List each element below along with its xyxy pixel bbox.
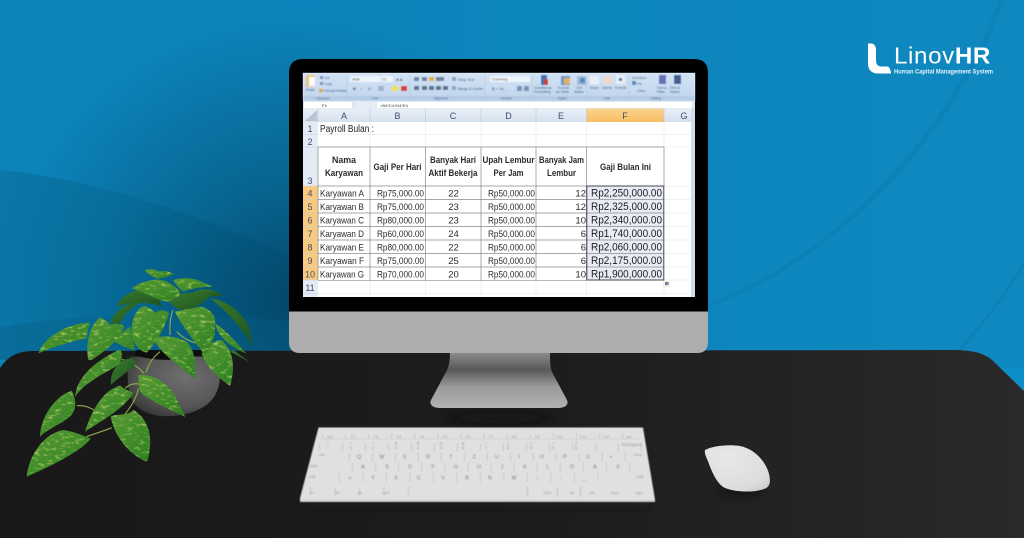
monitor stand xyxy=(430,352,568,408)
table header labels xyxy=(325,155,651,179)
logo icon xyxy=(868,44,891,74)
key labels row 3: T xyxy=(449,454,453,460)
table header labels: Aktif Bekerja xyxy=(428,168,478,179)
column A: names: Karyawan A xyxy=(320,188,365,200)
keyboard xyxy=(300,428,655,502)
key labels row 6: cmd xyxy=(543,491,551,495)
key labels row 1: F8 xyxy=(512,435,516,439)
key labels row 6: shift xyxy=(309,475,316,479)
key labels row 4: L xyxy=(546,464,550,470)
key labels row 4: J xyxy=(501,464,504,470)
excel ribbon: $ ~ % , xyxy=(492,86,506,92)
key labels row 5: V xyxy=(441,476,445,482)
key labels row 6: ctrl xyxy=(334,491,340,495)
key labels row 1 xyxy=(327,435,633,439)
scrollbar xyxy=(691,108,695,297)
row headers: 10 xyxy=(305,270,315,280)
excel ribbon: Styles xyxy=(574,90,584,94)
column A: names: Karyawan F xyxy=(320,256,364,267)
formula bar xyxy=(303,101,695,108)
formula bar: =B4*C4+D4*E4 xyxy=(380,103,409,108)
payroll table xyxy=(318,147,670,287)
column B: daily wage: Rp70,000.00 xyxy=(377,270,424,280)
column A: names: Karyawan B xyxy=(320,202,364,213)
excel ribbon: Cells xyxy=(603,96,610,100)
key labels row 2: ´ xyxy=(596,446,598,450)
excel ribbon: Editing xyxy=(651,96,661,100)
key labels row 2: ) xyxy=(530,441,532,446)
key labels row 4: A xyxy=(361,464,365,470)
key labels row 1: F7 xyxy=(489,435,493,439)
key labels row 5: M xyxy=(512,476,517,482)
key labels row 2: 9 xyxy=(530,446,533,450)
excel ribbon: I xyxy=(361,86,363,91)
key labels row 5: N xyxy=(488,476,492,482)
column B: daily wage: Rp75,000.00 xyxy=(377,256,424,267)
key labels row 2: 4 xyxy=(417,446,420,450)
key labels row 5: X xyxy=(394,476,398,482)
excel ribbon: Clear xyxy=(637,89,646,93)
title cell: Payroll Bulan: Payroll Bulan : xyxy=(320,124,374,135)
column D: overtime rate: Rp50,000.00 xyxy=(488,202,535,213)
key labels row 1: F5 xyxy=(443,435,447,439)
excel ribbon: 12 xyxy=(382,78,386,82)
spreadsheet screen xyxy=(303,73,695,297)
key labels row 2: ß xyxy=(575,446,578,450)
excel ribbon: Select xyxy=(670,90,680,94)
key labels row 2: ` xyxy=(596,441,598,446)
monitor xyxy=(289,59,708,408)
excel ribbon: Styles xyxy=(558,96,567,100)
key labels row 2: 2 xyxy=(372,446,375,450)
excel ribbon: Format Painter xyxy=(324,89,348,93)
excel ribbon: Arial xyxy=(352,78,360,82)
key labels row 6 xyxy=(309,453,644,495)
key labels row 3: R xyxy=(426,454,430,460)
key labels row 2: § xyxy=(395,441,398,446)
key labels row 2: 7 xyxy=(485,446,488,450)
key labels row 2: ( xyxy=(507,441,509,446)
column C: active days xyxy=(448,188,459,280)
key labels row 1: F4 xyxy=(420,435,424,439)
key labels row 2: & xyxy=(462,441,465,446)
excel ribbon: Merge & Center xyxy=(458,87,484,91)
key labels row 2: / xyxy=(485,441,487,446)
key labels row 2: 5 xyxy=(440,446,443,450)
column D: overtime rate: Rp50,000.00 xyxy=(488,242,535,254)
key labels row 3: Q xyxy=(357,454,362,460)
logo wordmark: LinovHR xyxy=(894,42,991,68)
column E: overtime hours: 6 xyxy=(581,256,586,267)
key labels row 4: Ä xyxy=(593,464,597,470)
key labels row 3: E xyxy=(403,454,407,460)
key labels row 4: H xyxy=(477,464,481,470)
row headers: 5 xyxy=(307,202,313,212)
column C: active days: 25 xyxy=(448,256,459,267)
column headers: A xyxy=(341,111,347,121)
table header labels: Gaji Bulan Ini xyxy=(600,162,651,173)
column D: overtime rate: Rp50,000.00 xyxy=(488,216,535,226)
table header labels: Banyak Hari xyxy=(430,155,476,166)
key labels row 2: = xyxy=(552,441,555,446)
key labels row 6: enter xyxy=(634,453,643,457)
key labels row 6: cmd xyxy=(382,491,390,495)
key labels row 5: < xyxy=(348,476,352,482)
excel ribbon: Sort & xyxy=(657,86,667,90)
excel ribbon xyxy=(303,73,695,101)
column C: active days: 24 xyxy=(448,229,459,240)
column F: monthly pay: Rp1,740,000.00 xyxy=(591,228,662,240)
column F: monthly pay: Rp1,900,000.00 xyxy=(591,268,662,280)
column C: active days: 20 xyxy=(448,270,459,280)
key labels row 1: F3 xyxy=(397,435,401,439)
column E: overtime hours: 12 xyxy=(575,202,586,213)
row headers: 4 xyxy=(307,188,313,198)
key labels row 4: G xyxy=(454,464,458,470)
excel ribbon: Wrap Text xyxy=(458,78,474,82)
excel ribbon: Alignment xyxy=(434,96,448,100)
key labels row 2: " xyxy=(372,441,374,446)
key labels row 3: O xyxy=(540,454,545,460)
green foliage leaves xyxy=(27,269,246,477)
column headers: F xyxy=(622,111,628,121)
column A: names: Karyawan D xyxy=(320,229,364,240)
key labels row 4: D xyxy=(408,464,412,470)
column D: overtime rate: Rp50,000.00 xyxy=(488,188,535,200)
key labels row 5 xyxy=(348,476,586,482)
column B: daily wage: Rp80,000.00 xyxy=(377,216,424,226)
excel ribbon: U xyxy=(368,86,371,91)
mouse xyxy=(705,445,770,495)
key labels row 3: Z xyxy=(472,454,476,460)
key labels row 5: C xyxy=(417,476,421,482)
column headers: G xyxy=(680,111,688,121)
key labels row 3: I xyxy=(518,454,520,460)
keyboard body xyxy=(300,428,655,502)
key labels row 4: # xyxy=(616,464,620,470)
table header labels: Nama xyxy=(332,155,357,166)
key labels row 6: alt xyxy=(570,491,575,495)
column A: names: Karyawan C xyxy=(320,216,364,226)
desk xyxy=(0,350,1024,538)
key labels row 1: F9 xyxy=(535,435,539,439)
column B: daily wage: Rp60,000.00 xyxy=(377,229,424,240)
key labels row 4: F xyxy=(431,464,435,470)
column E: overtime hours: 6 xyxy=(581,229,586,240)
key labels row 1: pwr xyxy=(626,435,633,439)
key labels row 2 xyxy=(327,441,643,450)
logo tagline: Human Capital Management System xyxy=(894,68,993,76)
row headers: 11 xyxy=(305,283,315,293)
key labels row 2: 3 xyxy=(395,446,398,450)
column C: active days: 22 xyxy=(448,242,459,254)
key labels row 4: S xyxy=(385,464,389,470)
key outlines xyxy=(310,436,642,492)
excel ribbon: Number xyxy=(501,96,513,100)
key labels row 1: F10 xyxy=(557,435,563,439)
column E: overtime hours: 10 xyxy=(575,270,586,280)
key labels row 1: F2 xyxy=(374,435,378,439)
key labels row 1: esc xyxy=(327,435,333,439)
excel ribbon: Fill xyxy=(637,82,642,86)
row headers: 8 xyxy=(307,242,313,252)
key labels row 2: ! xyxy=(350,441,352,446)
key labels row 1: F1 xyxy=(351,435,355,439)
row headers: 9 xyxy=(307,256,313,266)
excel ribbon: Cell xyxy=(576,86,582,90)
row headers: 7 xyxy=(307,229,313,239)
key labels row 6: down xyxy=(610,491,620,495)
key labels row 3 xyxy=(357,454,613,460)
dark background leaves xyxy=(110,289,253,385)
excel ribbon: Format xyxy=(558,86,569,90)
excel ribbon: Paste xyxy=(306,88,315,92)
column E: overtime hours: 10 xyxy=(575,216,586,226)
excel ribbon: Filter xyxy=(657,90,666,94)
key labels row 5: Y xyxy=(371,476,375,482)
key labels row 2: $ xyxy=(417,441,420,446)
excel ribbon: Clipboard xyxy=(316,96,330,100)
excel ribbon: Conditional xyxy=(534,86,552,90)
column headers: D xyxy=(505,111,512,121)
column C: active days: 23 xyxy=(448,216,459,226)
excel ribbon: Find & xyxy=(670,86,681,90)
excel ribbon: Insert xyxy=(590,86,599,90)
column D: overtime rate: Rp50,000.00 xyxy=(488,270,535,280)
column headers: C xyxy=(450,111,457,121)
key labels row 1: F6 xyxy=(466,435,470,439)
column B: daily wage: Rp80,000.00 xyxy=(377,242,424,254)
row headers: 3 xyxy=(307,176,313,186)
excel ribbon: Delete xyxy=(602,86,612,90)
column E: overtime hours: 6 xyxy=(581,242,586,254)
excel ribbon: B xyxy=(353,86,356,91)
key labels row 2: ? xyxy=(575,441,578,446)
column headers: E xyxy=(558,111,564,121)
key labels row 5: ; xyxy=(536,476,538,482)
column E: overtime hours: 12 xyxy=(575,188,586,200)
key labels row 6: alt xyxy=(358,491,363,495)
excel ribbon: Copy xyxy=(324,82,332,86)
key labels row 6: right xyxy=(635,491,644,495)
excel ribbon: as Table xyxy=(556,90,569,94)
key labels row 2: ° xyxy=(327,441,329,446)
key labels row 5: _ xyxy=(581,476,586,482)
column F: monthly pay: Rp2,250,000.00 xyxy=(591,188,662,200)
row headers xyxy=(303,122,318,297)
column F: monthly pay: Rp2,060,000.00 xyxy=(591,242,662,254)
column F: monthly pay: Rp2,325,000.00 xyxy=(591,201,662,213)
monitor chin xyxy=(289,312,708,353)
column D: overtime rate xyxy=(488,188,535,280)
table header labels: Per Jam xyxy=(494,168,524,179)
monitor bezel xyxy=(289,59,708,312)
key labels row 5: B xyxy=(465,476,469,482)
table header labels: Upah Lembur xyxy=(482,155,535,166)
key labels row 4: K xyxy=(523,464,527,470)
column A: names xyxy=(320,188,365,280)
excel ribbon: Format xyxy=(615,86,626,90)
key labels row 6: fn xyxy=(310,491,314,495)
column E: overtime hours xyxy=(575,188,586,280)
row headers: 1 xyxy=(307,124,313,134)
key labels row 6: tab xyxy=(319,453,325,457)
table header labels: Karyawan xyxy=(325,168,363,179)
key labels row 2: backspace xyxy=(622,442,643,447)
key labels row 1: F11 xyxy=(580,435,586,439)
column F: monthly pay: Rp2,175,000.00 xyxy=(591,255,662,267)
formula bar: F4 xyxy=(322,103,327,108)
column D: overtime rate: Rp50,000.00 xyxy=(488,256,535,267)
column C: active days: 22 xyxy=(448,188,459,200)
key labels row 4: Ö xyxy=(570,464,575,470)
key labels row 2: 6 xyxy=(462,446,465,450)
logo: LinovHR xyxy=(868,42,993,76)
excel ribbon: A A xyxy=(396,77,403,82)
column A: names: Karyawan G xyxy=(320,270,364,280)
key labels row 2: 0 xyxy=(552,446,555,450)
key labels row 3: + xyxy=(609,454,613,460)
column B: daily wage: Rp75,000.00 xyxy=(377,202,424,213)
excel ribbon: Cut xyxy=(324,76,329,80)
column B: daily wage xyxy=(377,188,424,280)
column A: names: Karyawan E xyxy=(320,242,364,254)
column F: monthly pay: Rp2,340,000.00 xyxy=(591,214,662,226)
key labels row 2: % xyxy=(439,441,443,446)
key labels row 6: shift xyxy=(637,475,644,479)
key labels row 6: caps xyxy=(310,464,318,468)
column D: overtime rate: Rp50,000.00 xyxy=(488,229,535,240)
plant pot xyxy=(128,357,220,416)
key labels row 3: U xyxy=(495,454,499,460)
excel ribbon: Font xyxy=(372,96,378,100)
column headers: B xyxy=(394,111,401,121)
row headers: 6 xyxy=(307,216,313,226)
excel ribbon: Currency xyxy=(492,78,508,82)
table header labels: Lembur xyxy=(547,168,576,179)
column C: active days: 23 xyxy=(448,202,459,213)
key labels row 5: : xyxy=(560,476,562,482)
key labels row 1: F12 xyxy=(603,435,609,439)
key labels row 4 xyxy=(361,464,620,470)
plant xyxy=(27,269,253,477)
excel ribbon: AutoSum xyxy=(632,76,646,80)
table header labels: Banyak Jam xyxy=(539,155,584,166)
key labels row 2: 8 xyxy=(507,446,510,450)
key labels row 3: Ü xyxy=(586,454,590,460)
column F: monthly pay xyxy=(591,188,662,280)
row headers: 2 xyxy=(307,137,313,147)
key labels row 3: P xyxy=(563,454,567,460)
key labels row 6: left xyxy=(589,491,595,495)
key labels row 2: 1 xyxy=(350,446,353,450)
column B: daily wage: Rp75,000.00 xyxy=(377,188,424,200)
key labels row 3: W xyxy=(379,454,385,460)
excel ribbon: Formatting xyxy=(534,90,551,94)
grid lines xyxy=(318,122,692,297)
key labels row 2: ^ xyxy=(327,446,329,450)
table header labels: Gaji Per Hari xyxy=(374,162,422,173)
plant stems xyxy=(77,310,197,437)
column headers xyxy=(303,108,692,122)
